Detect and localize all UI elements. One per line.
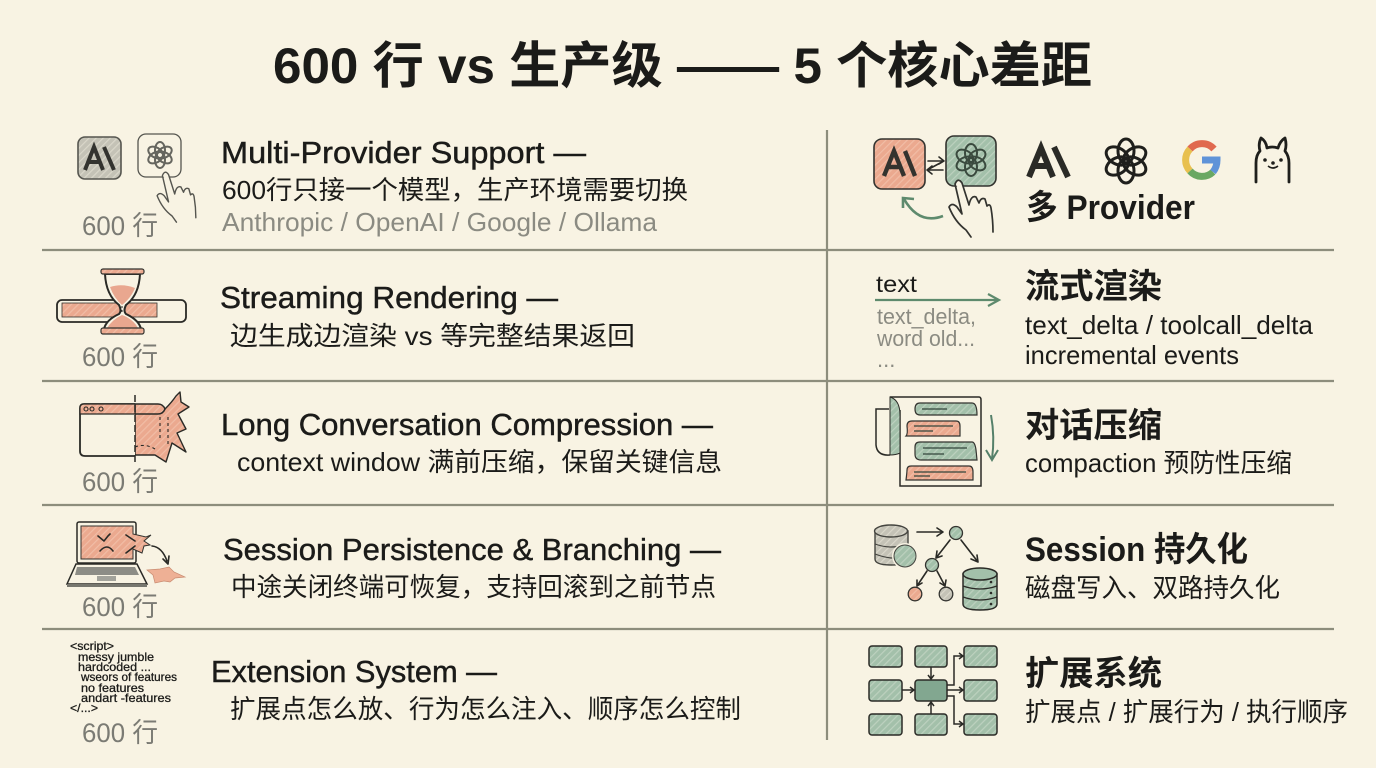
description: 扩展点 / 扩展行为 / 执行顺序 bbox=[1025, 697, 1348, 727]
panel: row 1 left, multi-provider bbox=[78, 134, 688, 241]
heading: Session 持久化 bbox=[1025, 531, 1248, 569]
icon: hourglass over progress bar bbox=[57, 269, 186, 334]
heading: Session Persistence & Branching — bbox=[223, 532, 721, 567]
label: 600 lines: 600 行 bbox=[82, 211, 158, 241]
label: 600 lines: 600 行 bbox=[82, 342, 158, 372]
heading: Streaming Rendering — bbox=[220, 280, 558, 315]
icon: text stream arrow: text bbox=[876, 271, 918, 297]
panel: row 5 right, extension bbox=[869, 646, 1348, 735]
label: 600 lines: 600 行 bbox=[82, 467, 158, 497]
panel: row 3 left, compression bbox=[80, 392, 722, 497]
icon: Google logo bbox=[1186, 144, 1217, 176]
heading: 多 Provider bbox=[1026, 189, 1195, 227]
label: 600 lines: 600 行 bbox=[82, 718, 158, 748]
heading: 对话压缩 bbox=[1025, 407, 1162, 445]
provider list: Anthropic / OpenAI / Google / Ollama bbox=[222, 207, 658, 237]
heading: Long Conversation Compression — bbox=[221, 407, 713, 442]
icon: messy script code: </...> bbox=[70, 701, 98, 715]
description: 边生成边渲染 vs 等完整结果返回 bbox=[230, 321, 635, 351]
panel: row 4 right, session persistence bbox=[874, 525, 1280, 610]
icon: gray Anthropic tile bbox=[78, 137, 121, 179]
icon: text stream arrow bbox=[875, 271, 999, 372]
panel: row 4 left, session bbox=[67, 522, 721, 622]
description: text_delta / toolcall_delta bbox=[1025, 310, 1314, 340]
description: 磁盘写入、双路持久化 bbox=[1025, 573, 1280, 603]
description: 600行只接一个模型，生产环境需要切换 bbox=[222, 175, 688, 205]
icon: messy script code: messy jumble bbox=[78, 650, 154, 664]
label: 600 lines: 600 行 bbox=[82, 592, 158, 622]
icon: messy script code: hardcoded ... bbox=[78, 660, 151, 674]
icon: switching provider tiles with hand bbox=[874, 136, 996, 237]
icon: chat scroll compaction bbox=[876, 397, 998, 486]
description: 中途关闭终端可恢复，支持回滚到之前节点 bbox=[231, 572, 716, 602]
icon: messy script code: wseors of features bbox=[80, 670, 177, 684]
title: 600 行 vs 生产级 —— 5 个核心差距 bbox=[273, 38, 1092, 94]
description: compaction 预防性压缩 bbox=[1025, 448, 1292, 478]
heading: 扩展系统 bbox=[1025, 655, 1162, 693]
icon: Anthropic logo bbox=[1029, 147, 1068, 177]
icon: OpenAI logo bbox=[1103, 139, 1149, 183]
description: 扩展点怎么放、行为怎么注入、顺序怎么控制 bbox=[230, 694, 741, 724]
icon: OpenAI tile with pointing hand bbox=[138, 134, 196, 222]
icon: text stream arrow: word old... bbox=[876, 326, 975, 351]
heading: Multi-Provider Support — bbox=[221, 135, 586, 170]
icon: messy script code: <script> bbox=[70, 639, 114, 653]
description: context window 满前压缩，保留关键信息 bbox=[237, 447, 722, 477]
description: incremental events bbox=[1025, 340, 1239, 370]
icon: crashed laptop bbox=[67, 522, 185, 587]
icon: messy script code: andart -features bbox=[81, 691, 171, 705]
heading: Extension System — bbox=[211, 654, 497, 689]
icon: session tree and databases bbox=[874, 525, 997, 610]
panel: row 1 right, multi provider bbox=[874, 136, 1289, 237]
icon: messy script code bbox=[70, 639, 177, 715]
panel: row 2 right, streaming bbox=[875, 268, 1314, 372]
panel: row 5 left, extension bbox=[70, 639, 741, 748]
panel: row 2 left, streaming bbox=[57, 269, 635, 372]
icon: messy script code: no features bbox=[81, 681, 144, 695]
heading: 流式渲染 bbox=[1025, 268, 1162, 306]
icon: Ollama llama logo bbox=[1256, 138, 1289, 182]
icon: extension system block diagram bbox=[869, 646, 997, 735]
panel: row 3 right, compaction bbox=[876, 397, 1292, 486]
icon: text stream arrow: text_delta, bbox=[877, 304, 976, 329]
icon: clipped browser window bbox=[80, 392, 189, 463]
icon: text stream arrow: ... bbox=[877, 347, 895, 372]
